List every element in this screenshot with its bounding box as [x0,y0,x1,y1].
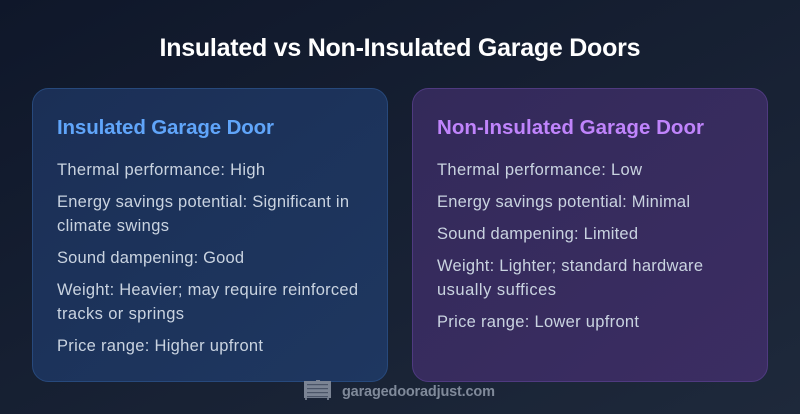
insulated: energy savings: climate swings [57,217,169,235]
heading: non-insulated: Non-Insulated Garage Door [437,116,704,139]
non-insulated: energy savings: Energy savings potential: Minimal [437,193,690,211]
insulated: sound dampening: Sound dampening: Good [57,249,244,267]
non-insulated: thermal performance: Thermal performance: Low [437,161,642,179]
non-insulated: weight: Weight: Lighter; standard hardware [437,257,703,275]
insulated: thermal performance: Thermal performance: High [57,161,265,179]
icon: garage door [304,380,331,400]
title: Insulated vs Non-Insulated Garage Doors [160,34,640,62]
non-insulated: price range: Price range: Lower upfront [437,313,639,331]
insulated: weight [57,281,358,323]
panel: non-insulated garage door [412,88,768,382]
non-insulated: weight [437,257,703,299]
insulated: weight: tracks or springs [57,305,184,323]
panel: insulated garage door [32,88,388,382]
insulated: energy savings [57,193,349,235]
non-insulated: sound dampening: Sound dampening: Limited [437,225,638,243]
heading: insulated: Insulated Garage Door [57,116,274,139]
insulated: energy savings: Energy savings potential: Significant in [57,193,349,211]
footer: website: garagedooradjust.com [342,384,495,400]
insulated: price range: Price range: Higher upfront [57,337,263,355]
non-insulated: weight: usually suffices [437,281,556,299]
insulated: weight: Weight: Heavier; may require reinforced [57,281,358,299]
